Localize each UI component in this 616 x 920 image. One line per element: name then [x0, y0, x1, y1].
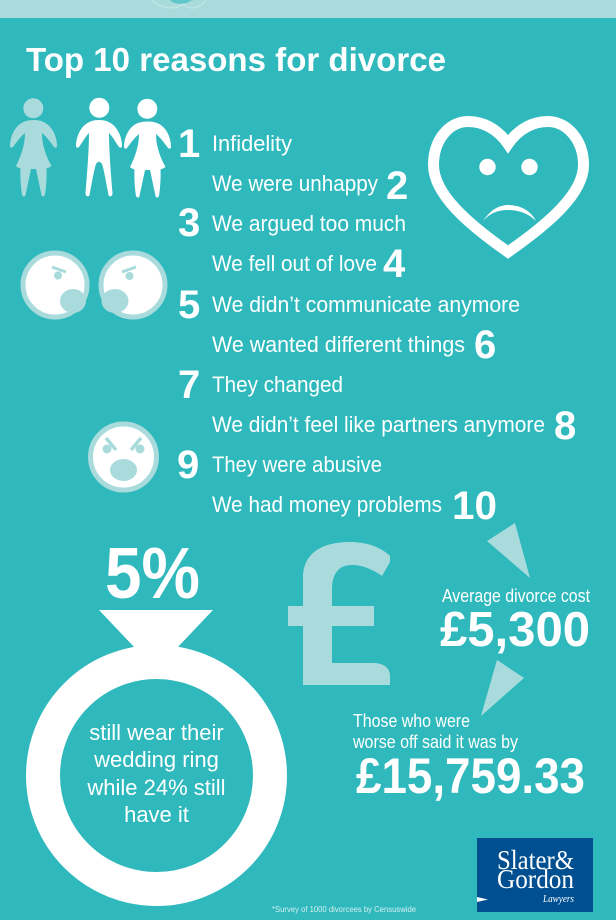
ring text: still wear their: [89, 720, 224, 745]
reason 9: 9: [177, 443, 199, 487]
title: Top 10 reasons for divorce: [26, 41, 446, 78]
reason 2: [212, 164, 408, 208]
reason 2: We were unhappy: [212, 171, 378, 196]
ring text: wedding ring: [93, 747, 219, 772]
reason 10: [212, 484, 497, 528]
top band: [0, 0, 616, 18]
logo: Slater & Gordon: Slater&: [497, 845, 574, 875]
reason 4: 4: [383, 242, 406, 286]
ring text: [86, 720, 226, 827]
reason 9: [177, 443, 382, 487]
icon: pound sign: [288, 542, 390, 685]
icon: sad heart: [434, 122, 584, 252]
reason 3: We argued too much: [212, 211, 406, 236]
icon: arguing face right: [101, 253, 165, 317]
reason 5: [178, 283, 520, 327]
reason 4: We fell out of love: [212, 251, 377, 276]
arrow: to worse off: [481, 660, 524, 716]
reason 3: 3: [178, 201, 200, 245]
reason 7: [178, 363, 343, 407]
reason 7: 7: [178, 363, 200, 407]
worse off value: £15,759.33: [356, 748, 585, 804]
reason 1: 1: [178, 122, 200, 166]
reason 8: We didn’t feel like partners anymore: [212, 412, 545, 437]
ring text: while 24% still: [86, 775, 226, 800]
icon: woman figure: [124, 99, 171, 198]
reason 10: 10: [452, 484, 497, 528]
reason 10: We had money problems: [212, 492, 442, 517]
reason 6: 6: [474, 323, 496, 367]
icon: grey woman figure: [10, 98, 57, 196]
logo: Slater & Gordon: Lawyers: [542, 894, 574, 905]
reason 3: [178, 201, 406, 245]
reason 8: [212, 404, 576, 448]
arrow: to average cost: [487, 523, 530, 578]
stat: 5%: 5%: [105, 534, 200, 614]
reason 7: They changed: [212, 372, 343, 397]
reason 5: 5: [178, 283, 200, 327]
reason 6: [212, 323, 496, 367]
reason 4: [212, 242, 406, 286]
icon: wedding ring: [43, 610, 270, 889]
logo: Slater & Gordon: Gordon: [497, 864, 574, 894]
average divorce cost value: £5,300: [440, 603, 590, 657]
worse off label: Those who were: [353, 711, 470, 731]
ring text: have it: [124, 802, 189, 827]
reason 8: 8: [554, 404, 576, 448]
reason 1: [178, 122, 292, 166]
reason 1: Infidelity: [212, 131, 292, 156]
reason 5: We didn’t communicate anymore: [212, 292, 520, 317]
average divorce cost label: Average divorce cost: [442, 586, 590, 606]
icon: shouting face: [90, 424, 156, 490]
icon: arguing face left: [23, 253, 87, 317]
reason 6: We wanted different things: [212, 332, 465, 357]
reason 2: 2: [386, 164, 408, 208]
list: top 10 reasons: [177, 122, 576, 528]
survey footnote: *Survey of 1000 divorcees by Censuswide: [272, 905, 417, 914]
worse off label: worse off said it was by: [352, 732, 518, 752]
worse off label: [352, 711, 518, 752]
icon: man figure: [76, 98, 122, 196]
reason 9: They were abusive: [212, 452, 382, 477]
logo: Slater & Gordon: [477, 838, 593, 912]
